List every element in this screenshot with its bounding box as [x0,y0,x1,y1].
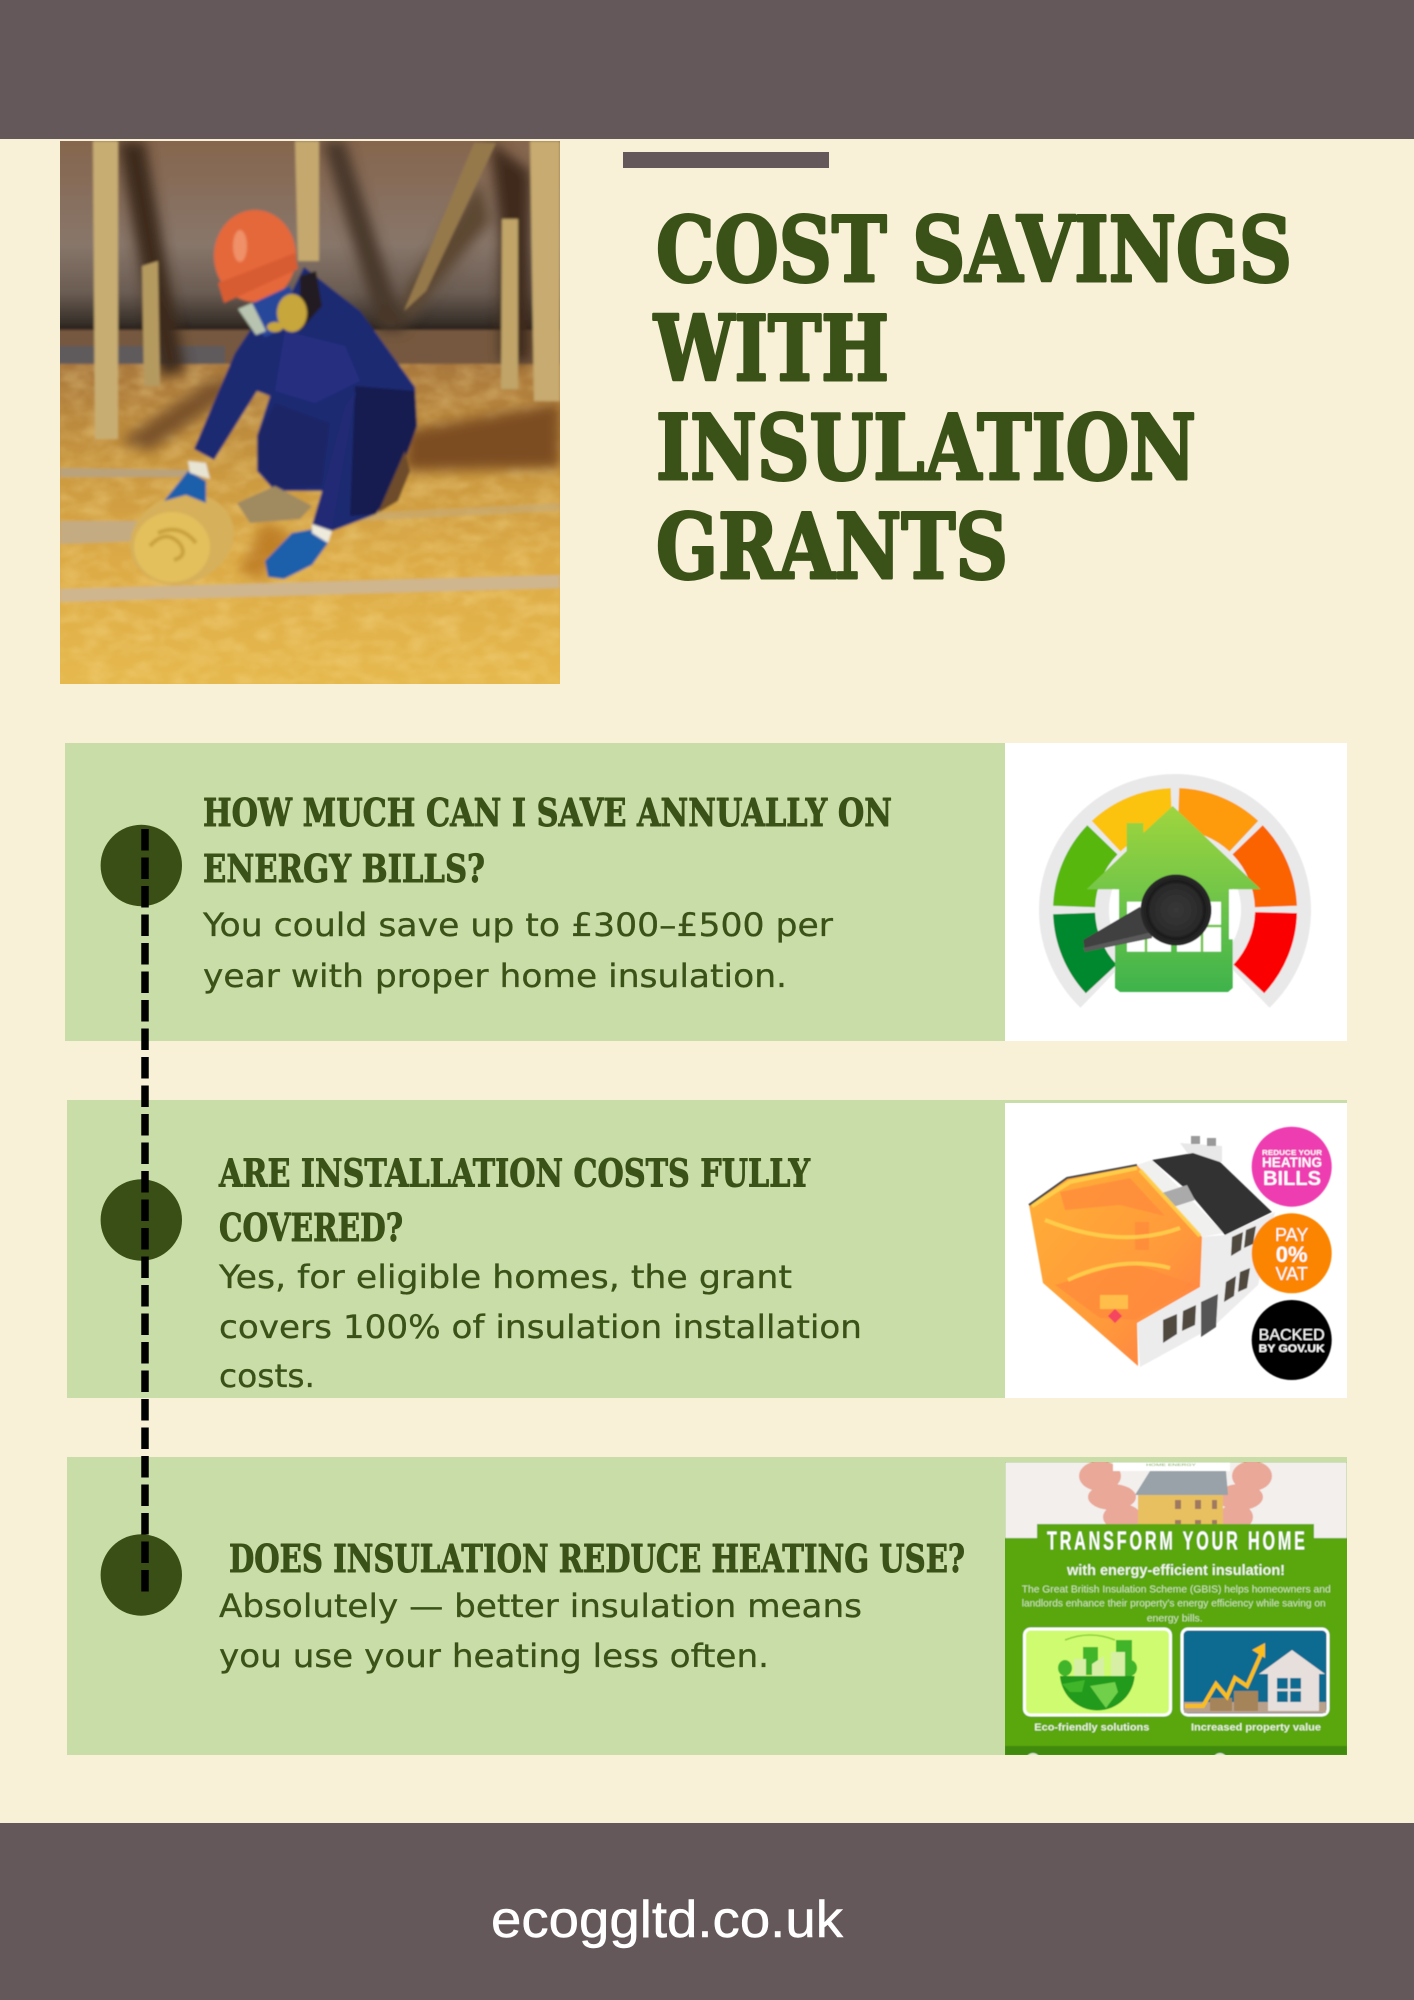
flyer: photo strip [1005,1462,1347,1538]
heading 1: HOW MUCH CAN I SAVE ANNUALLY ON [203,791,892,836]
gauge: white centre [1109,844,1241,976]
image: thermal cutaway house with badges [1005,1103,1347,1398]
photo: respirator and ear defender [238,271,322,337]
badge: backed by gov.uk: BACKED [1259,1327,1325,1344]
footer banner [0,1823,1414,2000]
badge: reduce your heating bills: HEATING [1262,1154,1322,1170]
gauge: knob [1140,874,1212,946]
heading 2: COVERED? [219,1206,403,1251]
flyer: hands [1078,1462,1272,1525]
image: transform your home flyer: HOME ENERGY [1146,1462,1197,1467]
accent bar above title [623,152,829,168]
photo: boots and knee [237,451,410,523]
top banner [0,0,1414,139]
panel: heating use [67,1457,1347,1767]
title: WITH [653,296,889,402]
badge: pay 0% VAT: PAY [1275,1225,1308,1245]
body text 1: You could save up to £300–£500 per [202,906,834,944]
panel 2 background [67,1100,1347,1398]
photo: insulation roll [130,497,234,584]
title: GRANTS [656,494,1008,600]
flyer: captions: Increased property value [1191,1722,1321,1734]
panel: installation costs [67,1100,1347,1398]
badge: backed by gov.uk [1252,1300,1332,1380]
flyer: small house [1137,1494,1224,1525]
gauge: needle [1083,907,1152,952]
heading 2: ARE INSTALLATION COSTS FULLY [218,1152,810,1196]
body text 3 [219,1587,862,1675]
flyer: subheading: with energy-efficient insulation! [1066,1562,1285,1579]
photo: floor shadows [120,381,560,581]
title: COST SAVINGS [656,197,1292,303]
body text 1 [202,906,834,995]
panel: annual savings [65,743,1347,1041]
body text 1: year with proper home insulation. [203,957,787,995]
flyer: heading: TRANSFORM YOUR HOME [1047,1525,1305,1556]
flyer: description: energy bills. [1147,1613,1203,1625]
gauge: coloured segments [1074,809,1276,979]
flyer: green heading tab [1037,1524,1314,1540]
photo: golden insulation floor [55,364,565,689]
photo: grey stripes on floor [60,468,560,602]
gauge: house edges [1114,889,1234,939]
heading 1: ENERGY BILLS? [203,847,485,892]
house: dark roof [1152,1153,1272,1235]
flyer: captions: Eco-friendly solutions [1034,1722,1149,1734]
gauge: house [1087,806,1261,992]
website address: ecoggltd.co.uk [491,1891,844,1949]
badge: reduce your heating bills: BILLS [1263,1168,1321,1190]
photo: attic wall [55,136,565,332]
body text 3: you use your heating less often. [219,1637,769,1675]
timeline marker 1 [101,825,182,906]
heading 3: DOES INSULATION REDUCE HEATING USE? [229,1537,965,1582]
heading 2 [218,1152,810,1251]
badge: backed by gov.uk: BY GOV.UK [1259,1343,1325,1355]
flyer: captions [1034,1722,1321,1734]
gauge: grey ring [1074,809,1276,983]
photo: hard hat [214,210,298,303]
dashed connector line [141,829,149,1592]
badge: pay 0% VAT: 0% [1276,1242,1308,1267]
badge: pay 0% VAT: VAT [1276,1264,1308,1284]
timeline marker 3 [101,1534,182,1616]
house: white side walls [1137,1212,1275,1367]
house: grey roof panel [1162,1185,1195,1208]
photo: navy overalls [194,267,417,531]
photo: floor joists band [55,330,565,370]
gauge: house windows [1127,902,1221,952]
body text 3: Absolutely — better insulation means [219,1587,862,1625]
photo: blue gloves [164,461,332,579]
image: energy rating gauge with house [1005,743,1347,1041]
body text 2: costs. [219,1357,315,1395]
timeline: circles and dashed connector [101,825,182,1616]
house: chimney [1180,1143,1222,1162]
image: transform your home flyer [1005,1461,1347,1767]
flyer: dark footer strip [1005,1746,1347,1755]
house: thermal cutaway interior [1029,1165,1202,1366]
house: light roof strip [1137,1160,1224,1237]
house: windows and door [1163,1226,1256,1343]
flyer: white logo tab [1113,1462,1230,1471]
photo: worker rolling loft insulation [55,136,565,689]
body text 2 [218,1258,862,1395]
title: INSULATION [656,395,1196,501]
badge: pay 0% VAT [1252,1213,1332,1293]
flyer: description [1022,1584,1331,1625]
body text 2: covers 100% of insulation installation [219,1308,862,1346]
panel 1 background [65,743,1005,1041]
flyer: property value card [1182,1629,1328,1715]
badge: reduce your heating bills [1252,1127,1332,1207]
timeline marker 2 [101,1179,182,1261]
flyer: description: The Great British Insulation Scheme (GBIS) helps homeowners and [1022,1584,1331,1596]
heading 1 [203,791,892,892]
flyer: description: landlords enhance their property's energy efficiency while saving on [1022,1598,1326,1610]
badge: reduce your heating bills: REDUCE YOUR [1262,1148,1323,1157]
photo: timber beams [93,141,560,439]
title [653,197,1292,600]
panel 3 background [67,1457,1347,1755]
photo: diagonal rafter shadows [118,141,530,376]
body text 2: Yes, for eligible homes, the grant [218,1258,792,1296]
flyer: eco card [1024,1629,1170,1715]
